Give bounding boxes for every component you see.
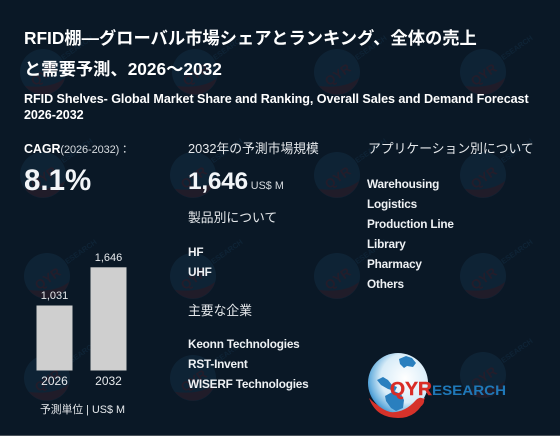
bar chart	[36, 252, 126, 388]
application list	[367, 177, 454, 291]
subtitle	[24, 92, 529, 122]
subtitle: RFID Shelves- Global Market Share and Ranking, Overall Sales and Demand Forecast	[24, 92, 529, 106]
company list: Keonn Technologies	[188, 337, 300, 351]
product list	[188, 245, 212, 279]
product list: HF	[188, 245, 203, 259]
application list: Pharmacy	[367, 257, 422, 271]
CAGR label: CAGR(2026-2032)：	[24, 142, 130, 156]
application list: Others	[367, 277, 404, 291]
company list: WISERF Technologies	[188, 377, 309, 391]
bar 2026	[36, 290, 72, 388]
application list: Warehousing	[367, 177, 439, 191]
title: RFID棚—グローバル市場シェアとランキング、全体の売上	[24, 28, 477, 48]
forecast market size heading: 2032年の予測市場規模	[188, 141, 319, 156]
bar 2026: 1,031	[41, 290, 68, 302]
logo: QYResearch	[368, 353, 506, 418]
title	[24, 28, 477, 79]
bar 2032: 1,646	[95, 252, 122, 264]
bar 2032: 2032	[95, 374, 122, 388]
application list: Production Line	[367, 217, 454, 231]
bar 2026: 2026	[41, 374, 68, 388]
product heading: 製品別について	[188, 210, 277, 225]
product list: UHF	[188, 265, 212, 279]
application list: Library	[367, 237, 406, 251]
company list	[188, 337, 309, 391]
bar 2032	[90, 252, 126, 388]
application heading: アプリケーション別について	[368, 141, 534, 156]
logo: QYResearch: ESEARCH	[432, 383, 506, 398]
subtitle: 2026-2032	[24, 108, 84, 122]
chart unit caption: 予測単位 | US$ M	[40, 404, 125, 416]
forecast market size value: 1,646 US$ M	[188, 168, 284, 195]
bottom edge	[0, 435, 560, 436]
title: と需要予測、2026～2032	[24, 59, 222, 79]
logo: QYResearch: QYR	[390, 378, 432, 399]
company list: RST-Invent	[188, 357, 248, 371]
CAGR value: 8.1%	[24, 164, 91, 197]
companies heading: 主要な企業	[188, 303, 252, 318]
application list: Logistics	[367, 197, 417, 211]
